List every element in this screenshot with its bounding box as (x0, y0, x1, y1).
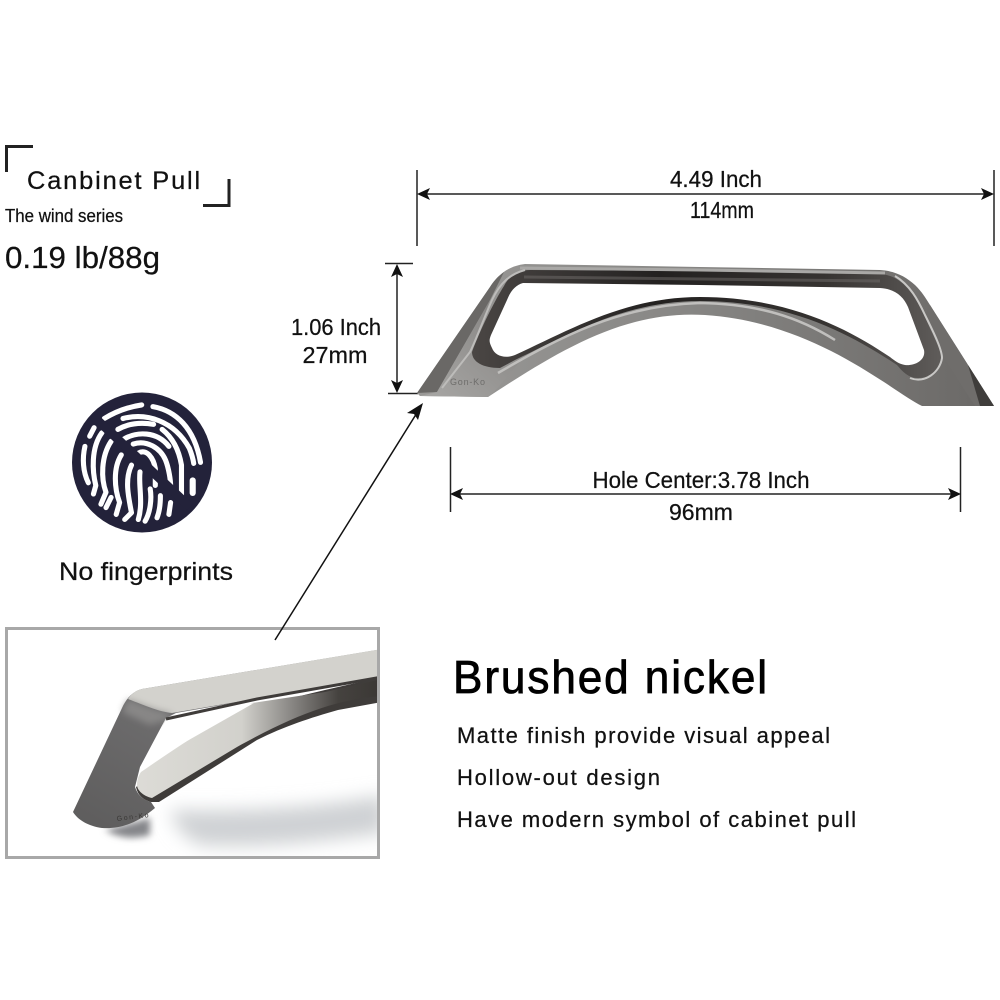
dimension: overall length (417, 166, 994, 246)
feature list: Hollow-out design (457, 765, 660, 790)
feature list: Have modern symbol of cabinet pull (457, 807, 856, 832)
product photo: brushed nickel handle (417, 264, 994, 406)
icon: no fingerprints (72, 392, 212, 532)
feature list (457, 723, 856, 832)
weight label: 0.19 lb/88g (5, 240, 160, 275)
subtitle: series name: The wind series (5, 206, 123, 226)
dimension: hole center: 96mm (669, 499, 733, 525)
handle leg (73, 649, 382, 828)
dimension: overall length: 4.49 Inch (670, 166, 762, 192)
caption: no fingerprints: No fingerprints (59, 558, 233, 586)
left lit face (420, 300, 530, 397)
inner white opening (164, 703, 254, 742)
inset photo: handle foot close-up (6, 628, 385, 858)
dimension: hole center (450, 447, 961, 525)
lower band outer dark edge (136, 677, 382, 802)
engraved logo: Gon-Ko (116, 812, 149, 823)
lower band lit face (137, 690, 337, 798)
left dark facet (417, 272, 504, 393)
engraved logo: Gon-Ko (450, 377, 485, 387)
highlights (498, 303, 835, 373)
feature list: Matte finish provide visual appeal (457, 723, 830, 748)
top bar under edge (166, 677, 382, 719)
shadow (170, 795, 385, 846)
right dark edge (925, 305, 994, 406)
dimension: hole center: Hole Center:3.78 Inch (592, 467, 810, 493)
dimension: height (291, 264, 418, 394)
top bar sheen (520, 268, 885, 273)
heading: Canbinet Pull with corner brackets: Canbinet Pull (27, 167, 202, 195)
callout arrow from foot to inset (275, 403, 423, 640)
top bar face (128, 649, 382, 713)
dimension: height: 27mm (302, 342, 368, 368)
hole (490, 283, 924, 365)
dimension: overall length: 114mm (690, 197, 754, 223)
dark inner rim (472, 270, 941, 378)
heading: Brushed nickel: Brushed nickel (453, 651, 769, 703)
dimension: height: 1.06 Inch (291, 314, 381, 340)
heading: Canbinet Pull with corner brackets (6, 146, 229, 206)
